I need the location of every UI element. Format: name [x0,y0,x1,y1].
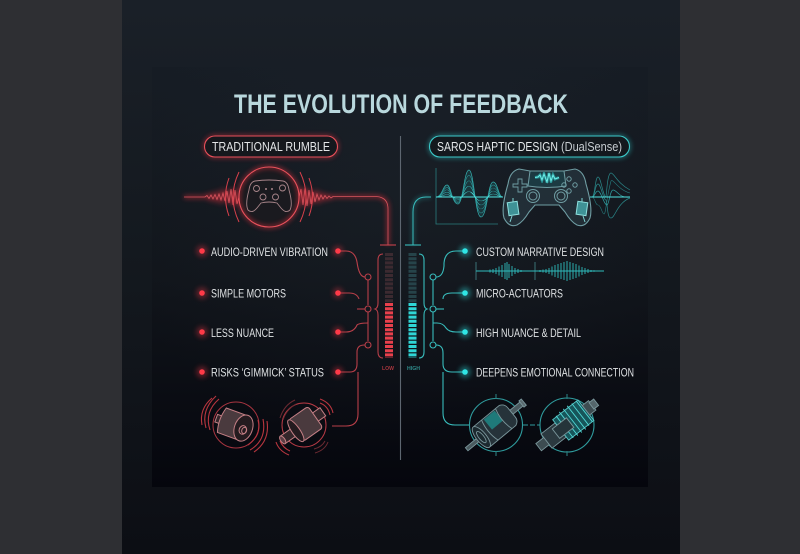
icon: haptic actuator two [529,390,605,459]
list: haptic traits [459,245,634,380]
icon: rumble motor one [201,396,267,452]
title: THE EVOLUTION OF FEEDBACK [234,89,568,119]
list: haptic traits: DEEPENS EMOTIONAL CONNECTION [476,368,634,380]
wave chart right of controller [590,173,630,218]
dark centre column [122,0,680,554]
link between actuators [523,424,540,426]
icon: dualsense controller [503,169,591,226]
heading pill: traditional rumble: TRADITIONAL RUMBLE [212,140,330,154]
wave chart left of controller [436,168,503,224]
list: rumble traits: AUDIO-DRIVEN VIBRATION [211,247,328,259]
panel: saros haptic design [405,136,634,459]
icon: gamepad in pulsing circle [226,167,312,227]
list: haptic traits: CUSTOM NARRATIVE DESIGN [476,247,604,259]
icon: rumble motor two [273,399,333,455]
icon: haptic actuator one [458,392,532,459]
list: rumble traits: SIMPLE MOTORS [211,288,286,300]
meter: high [407,253,420,372]
list: rumble traits: RISKS ‘GIMMICK’ STATUS [211,368,324,380]
heading pill: traditional rumble [204,136,338,157]
signal wave and connector [184,188,396,245]
narrative waveform [476,261,604,281]
meter: high: HIGH [407,366,420,372]
connectors: meter to haptic traits [419,251,470,425]
panel: traditional rumble [184,136,396,455]
centre divider [400,136,402,460]
connector: controller to meter [405,197,431,245]
heading pill: saros haptic design: SAROS HAPTIC DESIGN [437,140,558,154]
heading pill: saros haptic design: (DualSense) [561,140,622,154]
inner panel background [152,67,648,487]
meter: low: LOW [382,366,395,372]
list: haptic traits: MICRO-ACTUATORS [476,288,563,300]
list: rumble traits [196,245,328,380]
list: rumble traits: LESS NUANCE [211,328,274,340]
meter: low [382,253,395,372]
heading pill: saros haptic design [430,136,630,157]
connectors: rumble traits to meter [332,246,383,426]
list: haptic traits: HIGH NUANCE & DETAIL [476,328,581,340]
